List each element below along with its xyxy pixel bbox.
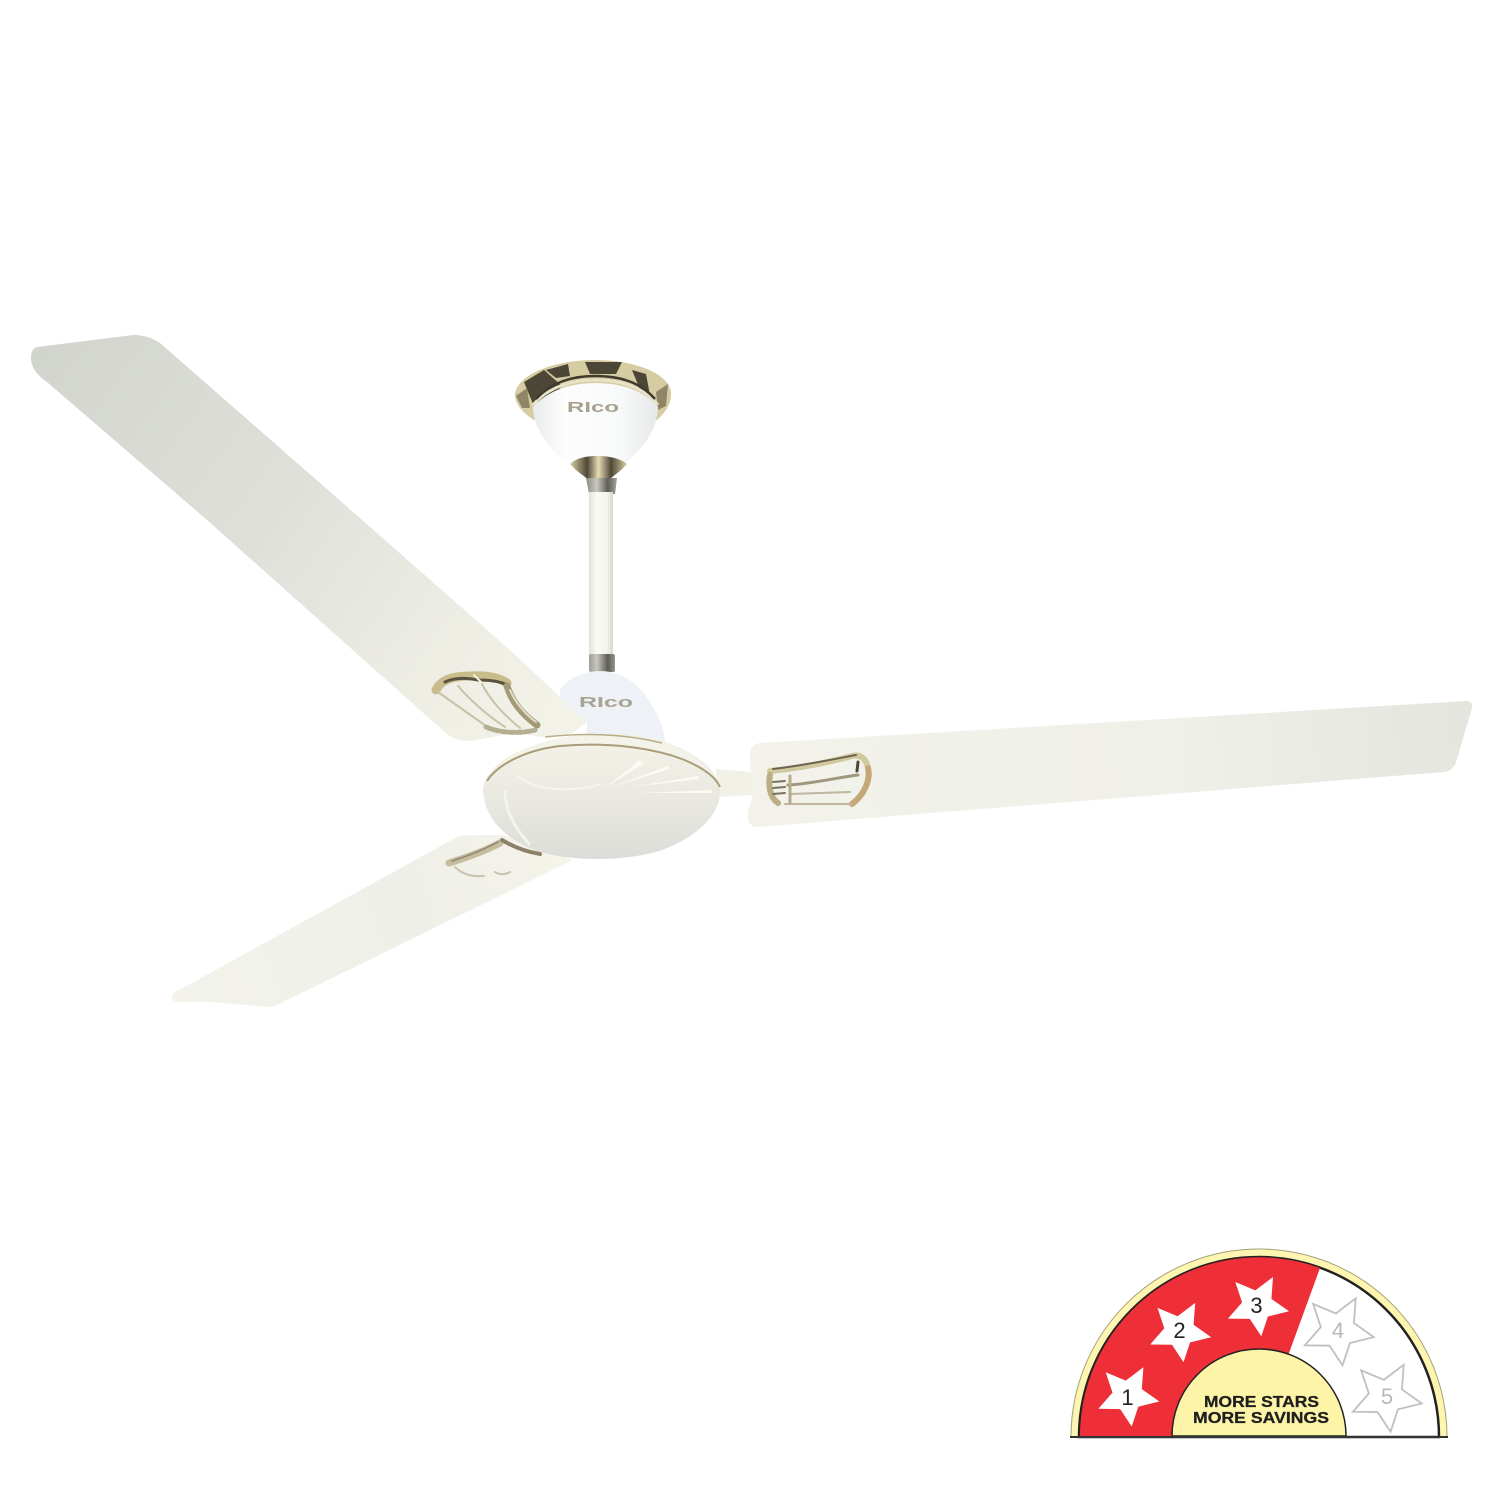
inner semicircle — [1172, 1349, 1346, 1436]
canopy neck — [570, 456, 627, 480]
star 2: 2 — [1173, 1318, 1186, 1343]
star 4: 4 — [1332, 1318, 1344, 1343]
star 3: 3 — [1250, 1293, 1263, 1318]
badge outer arc — [1071, 1249, 1447, 1437]
blade: right — [716, 701, 1472, 827]
blade bracket: right — [769, 755, 869, 804]
down rod — [589, 492, 613, 656]
motor hub — [483, 734, 720, 859]
star 3 — [1228, 1277, 1289, 1336]
blade bracket: upper left — [436, 675, 537, 732]
canopy logo: RIco — [567, 399, 619, 416]
star 4 — [1305, 1298, 1374, 1365]
star 5: 5 — [1381, 1384, 1393, 1409]
blade: lower left — [172, 835, 573, 1007]
white rating field — [1079, 1257, 1439, 1437]
blade: upper left — [31, 335, 587, 741]
badge slogan: MORE SAVINGS — [1193, 1410, 1329, 1427]
red filled segment — [1080, 1257, 1320, 1436]
base line — [1070, 1436, 1448, 1438]
rod collar — [586, 478, 617, 494]
canopy bell — [533, 383, 658, 463]
lower collar — [589, 654, 615, 672]
star 2 — [1150, 1303, 1211, 1362]
blade bracket: lower left — [449, 840, 540, 876]
motor dome — [560, 671, 665, 742]
ceiling fan — [31, 335, 1472, 1007]
canopy chrome rim — [515, 360, 671, 420]
star 5 — [1353, 1365, 1422, 1432]
badge slogan: MORE STARS — [1204, 1394, 1319, 1411]
star 1: 1 — [1121, 1385, 1134, 1410]
star 1 — [1098, 1367, 1159, 1426]
star rating badge — [1070, 1249, 1448, 1438]
badge slogan — [1193, 1394, 1329, 1427]
ceiling canopy — [515, 360, 671, 494]
dome logo: RIco — [579, 694, 633, 711]
